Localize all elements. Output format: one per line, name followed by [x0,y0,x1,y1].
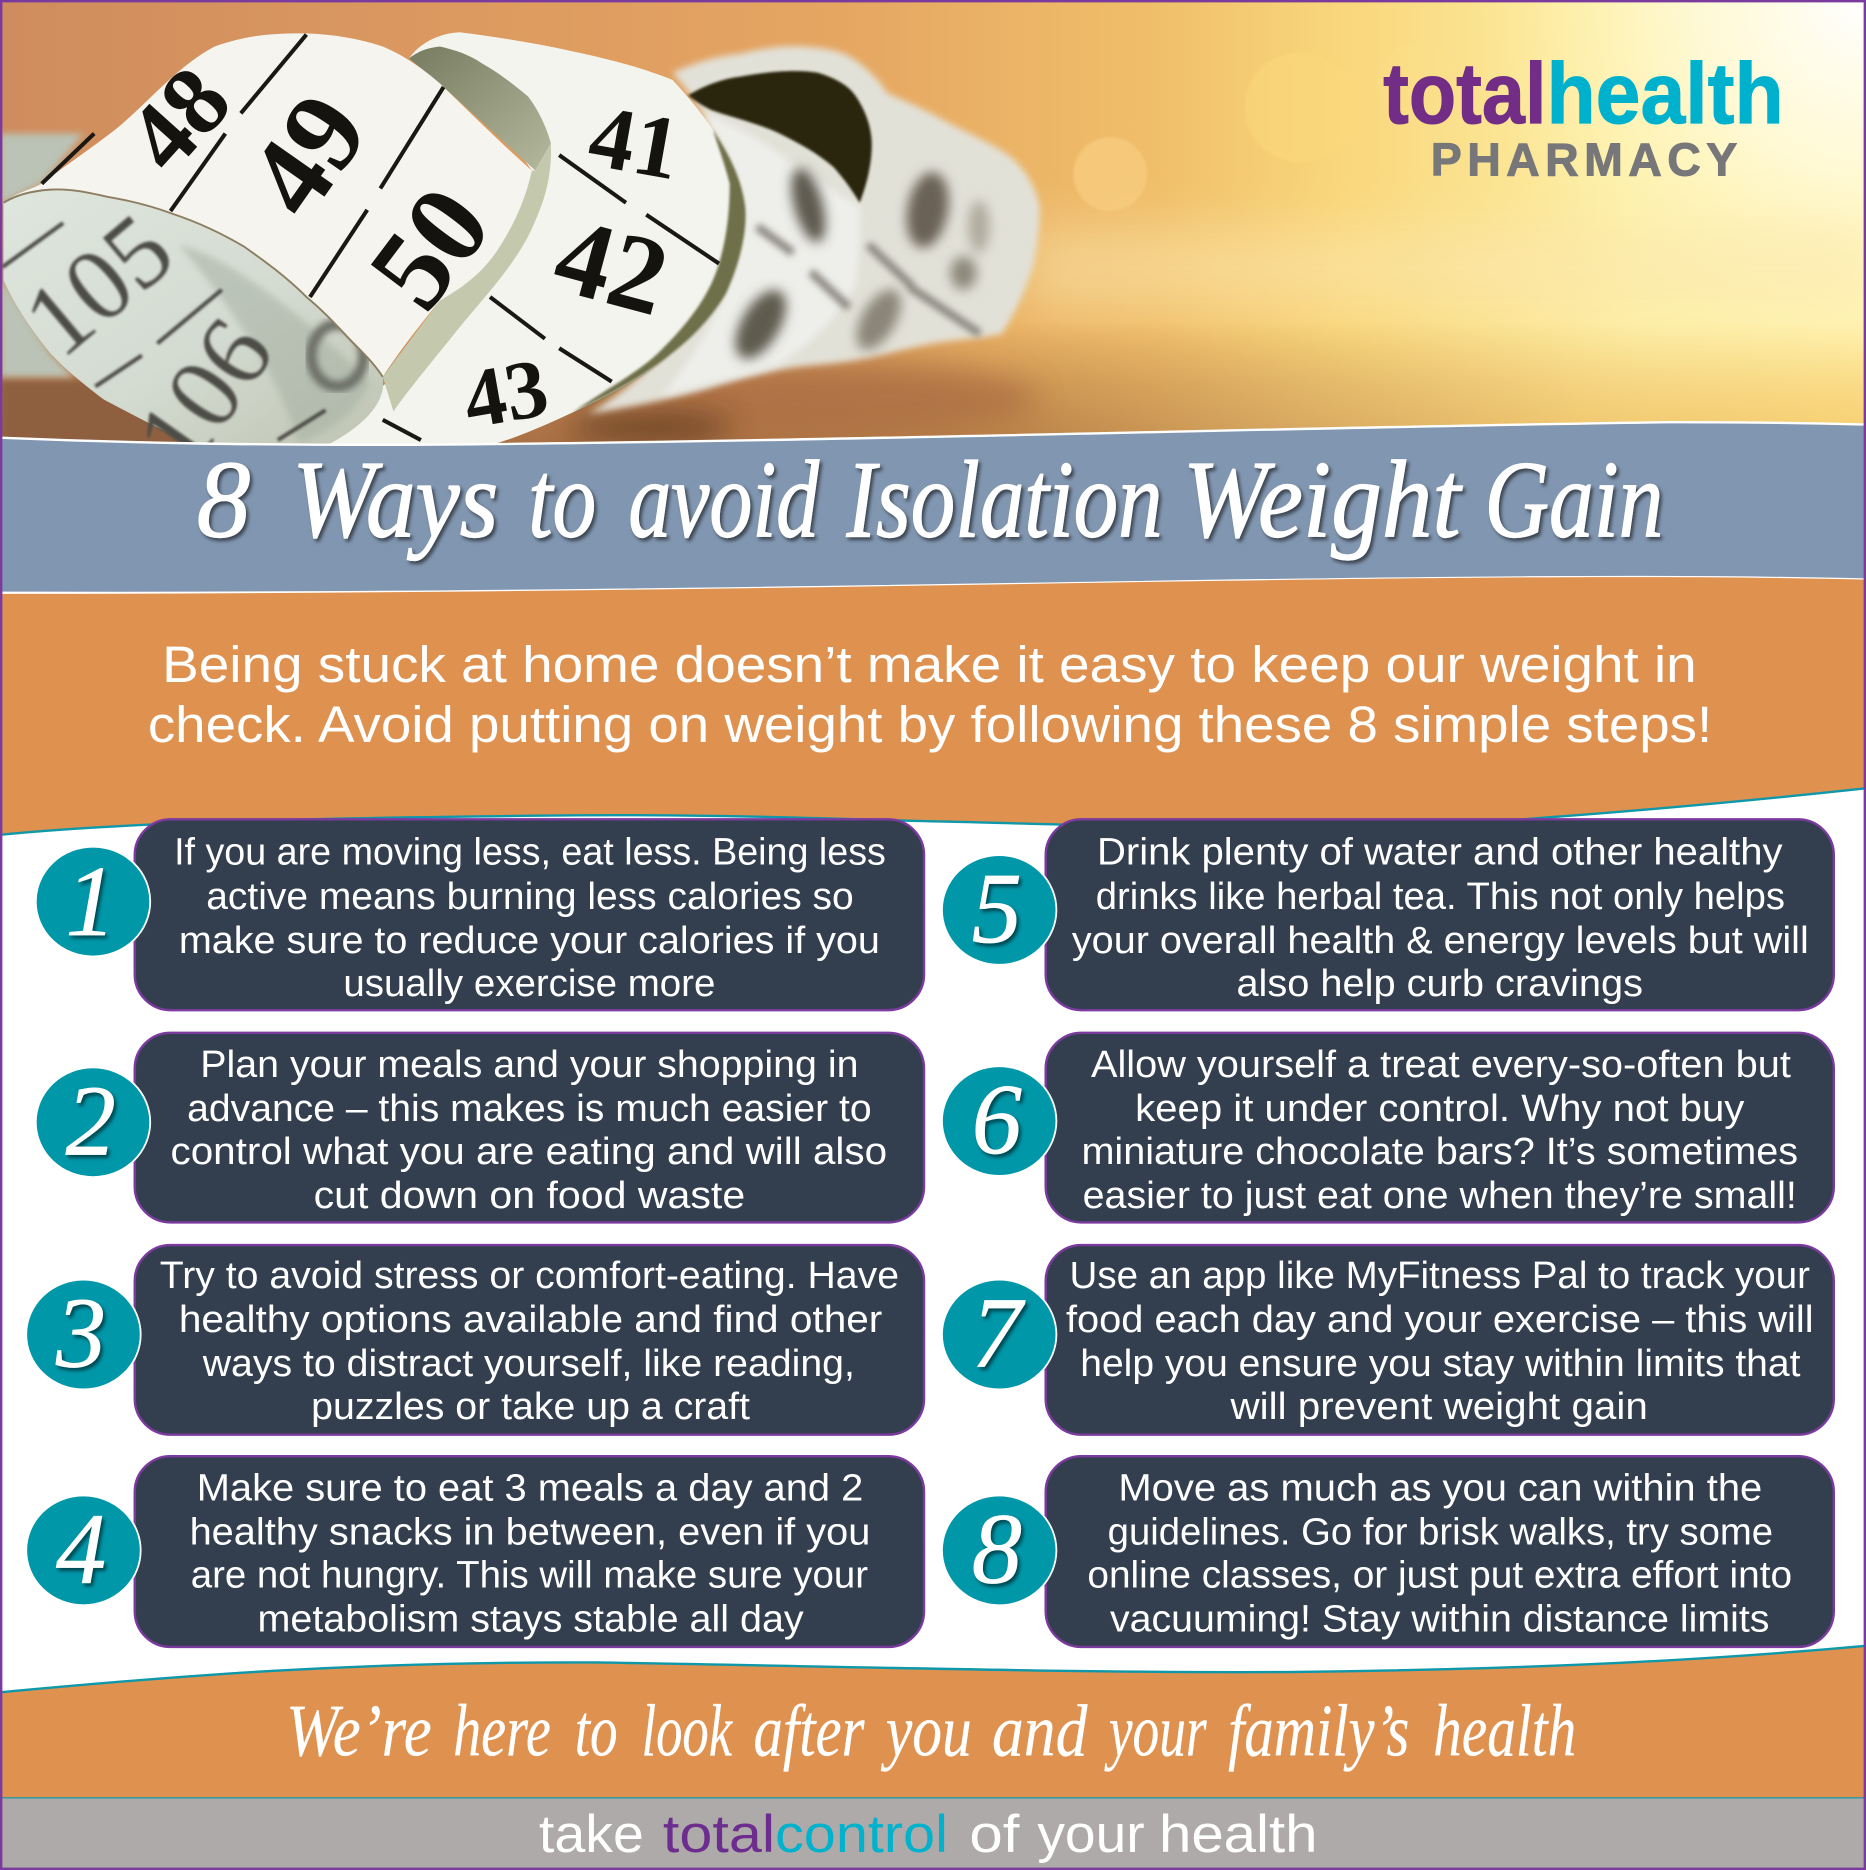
tagline: your [1037,1806,1145,1864]
closing message: your [1104,1690,1207,1772]
tape tick marks [42,35,719,440]
tape numerals: 42 [543,193,680,339]
step 8 badge: 8 [972,1494,1022,1605]
step 1 text: If you are moving less, eat less. Being less [174,831,886,874]
step 4 text: metabolism stays stable all day [258,1597,804,1640]
step 7 text: will prevent weight gain [1229,1385,1648,1428]
step 2 text: cut down on food waste [314,1174,745,1217]
step 4 text [190,1466,870,1640]
step 6 [942,1033,1834,1222]
title: 8 [197,439,250,561]
tape numerals: 105 [4,193,194,378]
intro text: Being stuck at home doesn’t make it easy to keep our weight in [162,636,1697,693]
step 2 badge: 2 [66,1065,116,1176]
step 1 [36,819,924,1010]
intro text [148,636,1712,753]
teal edge of intro band [0,788,1866,835]
bottom orange band [0,1646,1866,1798]
tagline: take [539,1806,644,1864]
step 4 text: healthy snacks in between, even if you [190,1510,870,1553]
step 2 text [171,1043,887,1217]
step 4 [26,1456,924,1647]
logo: health [1546,46,1784,142]
orange intro band [0,577,1866,835]
step 3 text: Try to avoid stress or comfort-eating. Have [160,1254,899,1297]
step 5 text: also help curb cravings [1236,962,1643,1005]
closing message: you [880,1690,972,1772]
closing message: to [575,1690,618,1772]
step 6 card [1046,1033,1834,1222]
title: Gain [1484,439,1663,561]
step 5 badge: 5 [972,853,1022,964]
closing message: here [453,1690,551,1772]
step 8 text: vacuuming! Stay within distance limits [1110,1597,1769,1640]
step 1 text: make sure to reduce your calories if you [179,919,880,962]
step 7 card [1046,1245,1834,1435]
step 3 card [135,1245,924,1435]
step 3 text: ways to distract yourself, like reading, [202,1342,855,1385]
step 8 text: guidelines. Go for brisk walks, try some [1108,1510,1773,1553]
tape: middle coil [322,32,746,446]
title band [0,422,1866,593]
step 2 text: control what you are eating and will also [171,1130,887,1173]
step 3 text: healthy options available and find other [179,1298,883,1341]
step 1 text: active means burning less calories so [206,875,854,918]
tape: inner surface [4,189,383,446]
step 3 [26,1245,924,1435]
step 1 text: usually exercise more [343,962,715,1005]
step 2 card [135,1033,924,1222]
tape numerals: 48 [106,47,252,192]
step 7 [942,1245,1834,1435]
step 4 text: Make sure to eat 3 meals a day and 2 [197,1466,863,1509]
step 6 text: easier to just eat one when they’re small! [1083,1174,1797,1217]
blurred numerals, far coil [785,165,832,246]
closing message [286,1690,1576,1772]
tape numerals: 41 [582,86,687,199]
step 6 text: Allow yourself a treat every-so-often but [1091,1043,1791,1086]
closing message: look [641,1690,733,1772]
step 2 [36,1033,924,1222]
closing message: health [1433,1690,1576,1772]
step 7 text [1066,1254,1814,1428]
step 2 text: advance – this makes is much easier to [187,1087,872,1130]
step 5 text: Drink plenty of water and other healthy [1097,831,1783,874]
step 6 text [1081,1043,1798,1217]
step 7 badge [942,1278,1056,1389]
title: Weight [1183,439,1463,561]
tagline [539,1806,1318,1864]
step 7 text: Use an app like MyFitness Pal to track your [1070,1254,1810,1297]
tape numerals [30,71,670,442]
tagline: of [969,1806,1020,1864]
step 4 card [135,1456,924,1647]
closing message: family’s [1228,1690,1409,1772]
step 5 [942,819,1834,1010]
step 4 badge: 4 [56,1494,106,1605]
step 1 badge [36,846,150,957]
title: avoid [628,439,820,561]
step 5 badge [942,853,1056,965]
step 5 text [1072,831,1809,1005]
step 3 text [160,1254,899,1428]
step 6 badge: 6 [972,1064,1022,1175]
step 8 badge [942,1494,1056,1605]
step 8 text [1087,1466,1792,1640]
step 5 text: your overall health & energy levels but will [1072,919,1809,962]
step 1 badge: 1 [66,846,116,957]
step 2 badge [36,1065,150,1177]
logo [1383,46,1784,185]
title [197,439,1663,561]
closing message: after [754,1690,865,1772]
title: to [528,439,596,561]
title: Isolation [846,439,1163,561]
title: Ways [292,439,498,561]
step 8 text: online classes, or just put extra effort into [1087,1553,1792,1596]
tagline: total [663,1806,775,1864]
logo: PHARMACY [1431,133,1737,185]
tape numerals: 49 [222,71,392,238]
step 3 badge: 3 [55,1278,106,1389]
tape numerals: 106 [115,299,295,490]
tagline: control [775,1806,948,1864]
tape: front band [4,33,532,377]
step 3 badge [26,1278,141,1389]
closing message: We’re [286,1690,432,1772]
step 6 badge [942,1064,1056,1176]
step 5 text: drinks like herbal tea. This not only helps [1096,875,1785,918]
tagline bar [0,1798,1866,1870]
tape: far blurred coil [588,46,1040,414]
step 6 text: miniature chocolate bars? It’s sometimes [1081,1130,1798,1173]
tape numerals: 50 [344,164,515,331]
step 4 text: are not hungry. This will make sure your [191,1553,868,1596]
tape numerals: 43 [457,342,555,447]
step 1 card [135,819,924,1010]
closing message: and [992,1690,1088,1772]
step 5 card [1046,819,1834,1010]
step 6 text: keep it under control. Why not buy [1135,1087,1744,1130]
tagline: health [1159,1806,1318,1864]
step 8 card [1046,1456,1834,1647]
step 2 text: Plan your meals and your shopping in [200,1043,858,1086]
intro text: check. Avoid putting on weight by following these 8 simple steps! [148,696,1712,753]
logo: total [1383,46,1546,142]
step 8 text: Move as much as you can within the [1118,1466,1762,1509]
step 3 text: puzzles or take up a craft [311,1385,750,1428]
step 7 text: food each day and your exercise – this will [1066,1298,1814,1341]
step 8 [942,1456,1834,1647]
header photo: tape measure [2,2,1864,444]
step 1 text [174,831,886,1005]
step 7 badge: 7 [972,1278,1026,1389]
step 7 text: help you ensure you stay within limits that [1080,1342,1801,1385]
step 4 badge [26,1494,141,1605]
